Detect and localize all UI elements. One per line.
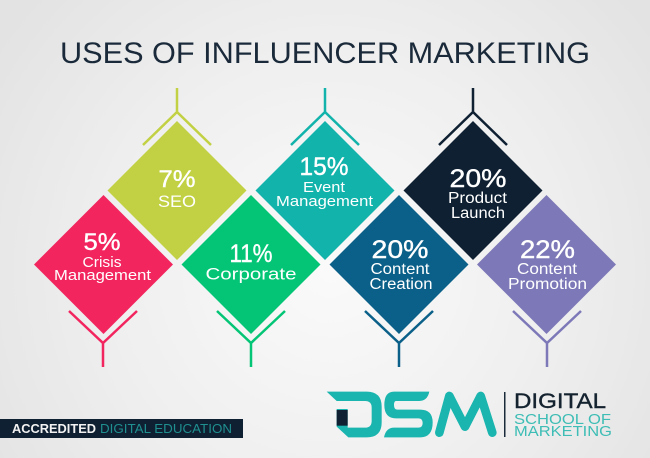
label: content creation xyxy=(370,236,432,293)
logo wordmark: DIGITAL xyxy=(514,390,606,413)
panel: product launch 20% xyxy=(404,88,542,260)
panel: crisis management 5% xyxy=(34,195,173,367)
icon: creation chevron connector xyxy=(365,311,433,367)
diamond: seo xyxy=(108,121,246,260)
label: content promotion: Promotion xyxy=(508,276,587,293)
title: USES OF INFLUENCER MARKETING xyxy=(60,37,590,70)
label: seo: SEO xyxy=(158,192,196,211)
label: content creation: 20% xyxy=(372,236,428,264)
diamond: corporate xyxy=(182,195,320,334)
logo: dsm digital school of marketing xyxy=(327,390,612,440)
logo wordmark xyxy=(514,390,612,440)
label: crisis management xyxy=(54,229,152,284)
icon: corporate chevron connector xyxy=(217,311,285,367)
label: seo: 7% xyxy=(158,166,196,193)
panel: corporate 11% xyxy=(182,195,320,367)
label: event management: 15% xyxy=(300,153,348,181)
label: product launch xyxy=(448,165,508,222)
label: event management: Management xyxy=(276,193,374,210)
icon: dsm monogram xyxy=(327,392,492,437)
diamond: content promotion xyxy=(477,195,616,334)
diamond: crisis management xyxy=(34,195,173,334)
label: content creation: Content xyxy=(370,261,430,278)
label: corporate: 11% xyxy=(230,240,272,268)
label: event management: Event xyxy=(303,179,346,196)
label: seo xyxy=(158,166,196,211)
label: product launch: Product xyxy=(448,190,508,207)
label: content promotion xyxy=(508,236,587,293)
icon: seo chevron connector xyxy=(143,88,211,145)
label: content promotion: Content xyxy=(517,261,578,278)
label: content promotion: 22% xyxy=(520,236,575,264)
label: product launch: Launch xyxy=(451,205,505,222)
panel: event management 15% xyxy=(256,88,394,260)
panel: content promotion 22% xyxy=(477,195,616,367)
label: crisis management: Management xyxy=(54,267,152,284)
banner: accredited digital education: ACCREDITED xyxy=(12,422,96,436)
label: event management xyxy=(276,153,374,210)
label: product launch: 20% xyxy=(450,165,506,193)
banner: accredited digital education xyxy=(0,419,243,438)
icon: product chevron connector xyxy=(439,88,507,145)
label: corporate xyxy=(206,240,296,284)
diamond: product launch xyxy=(404,121,542,260)
icon: crisis chevron connector xyxy=(69,311,137,367)
diamond: event management xyxy=(256,121,394,260)
icon: promotion chevron connector xyxy=(513,311,581,367)
icon: event chevron connector xyxy=(291,88,359,145)
label: crisis management: 5% xyxy=(84,229,120,256)
logo wordmark: MARKETING xyxy=(514,423,612,440)
banner: accredited digital education: DIGITAL EDUCATION xyxy=(100,422,232,436)
panel: content creation 20% xyxy=(330,195,468,367)
logo wordmark: SCHOOL OF xyxy=(514,411,611,428)
label: content creation: Creation xyxy=(370,276,432,293)
diamond: content creation xyxy=(330,195,468,334)
label: crisis management: Crisis xyxy=(82,254,122,271)
label: corporate: Corporate xyxy=(206,264,296,284)
panel: seo 7% xyxy=(108,88,246,260)
